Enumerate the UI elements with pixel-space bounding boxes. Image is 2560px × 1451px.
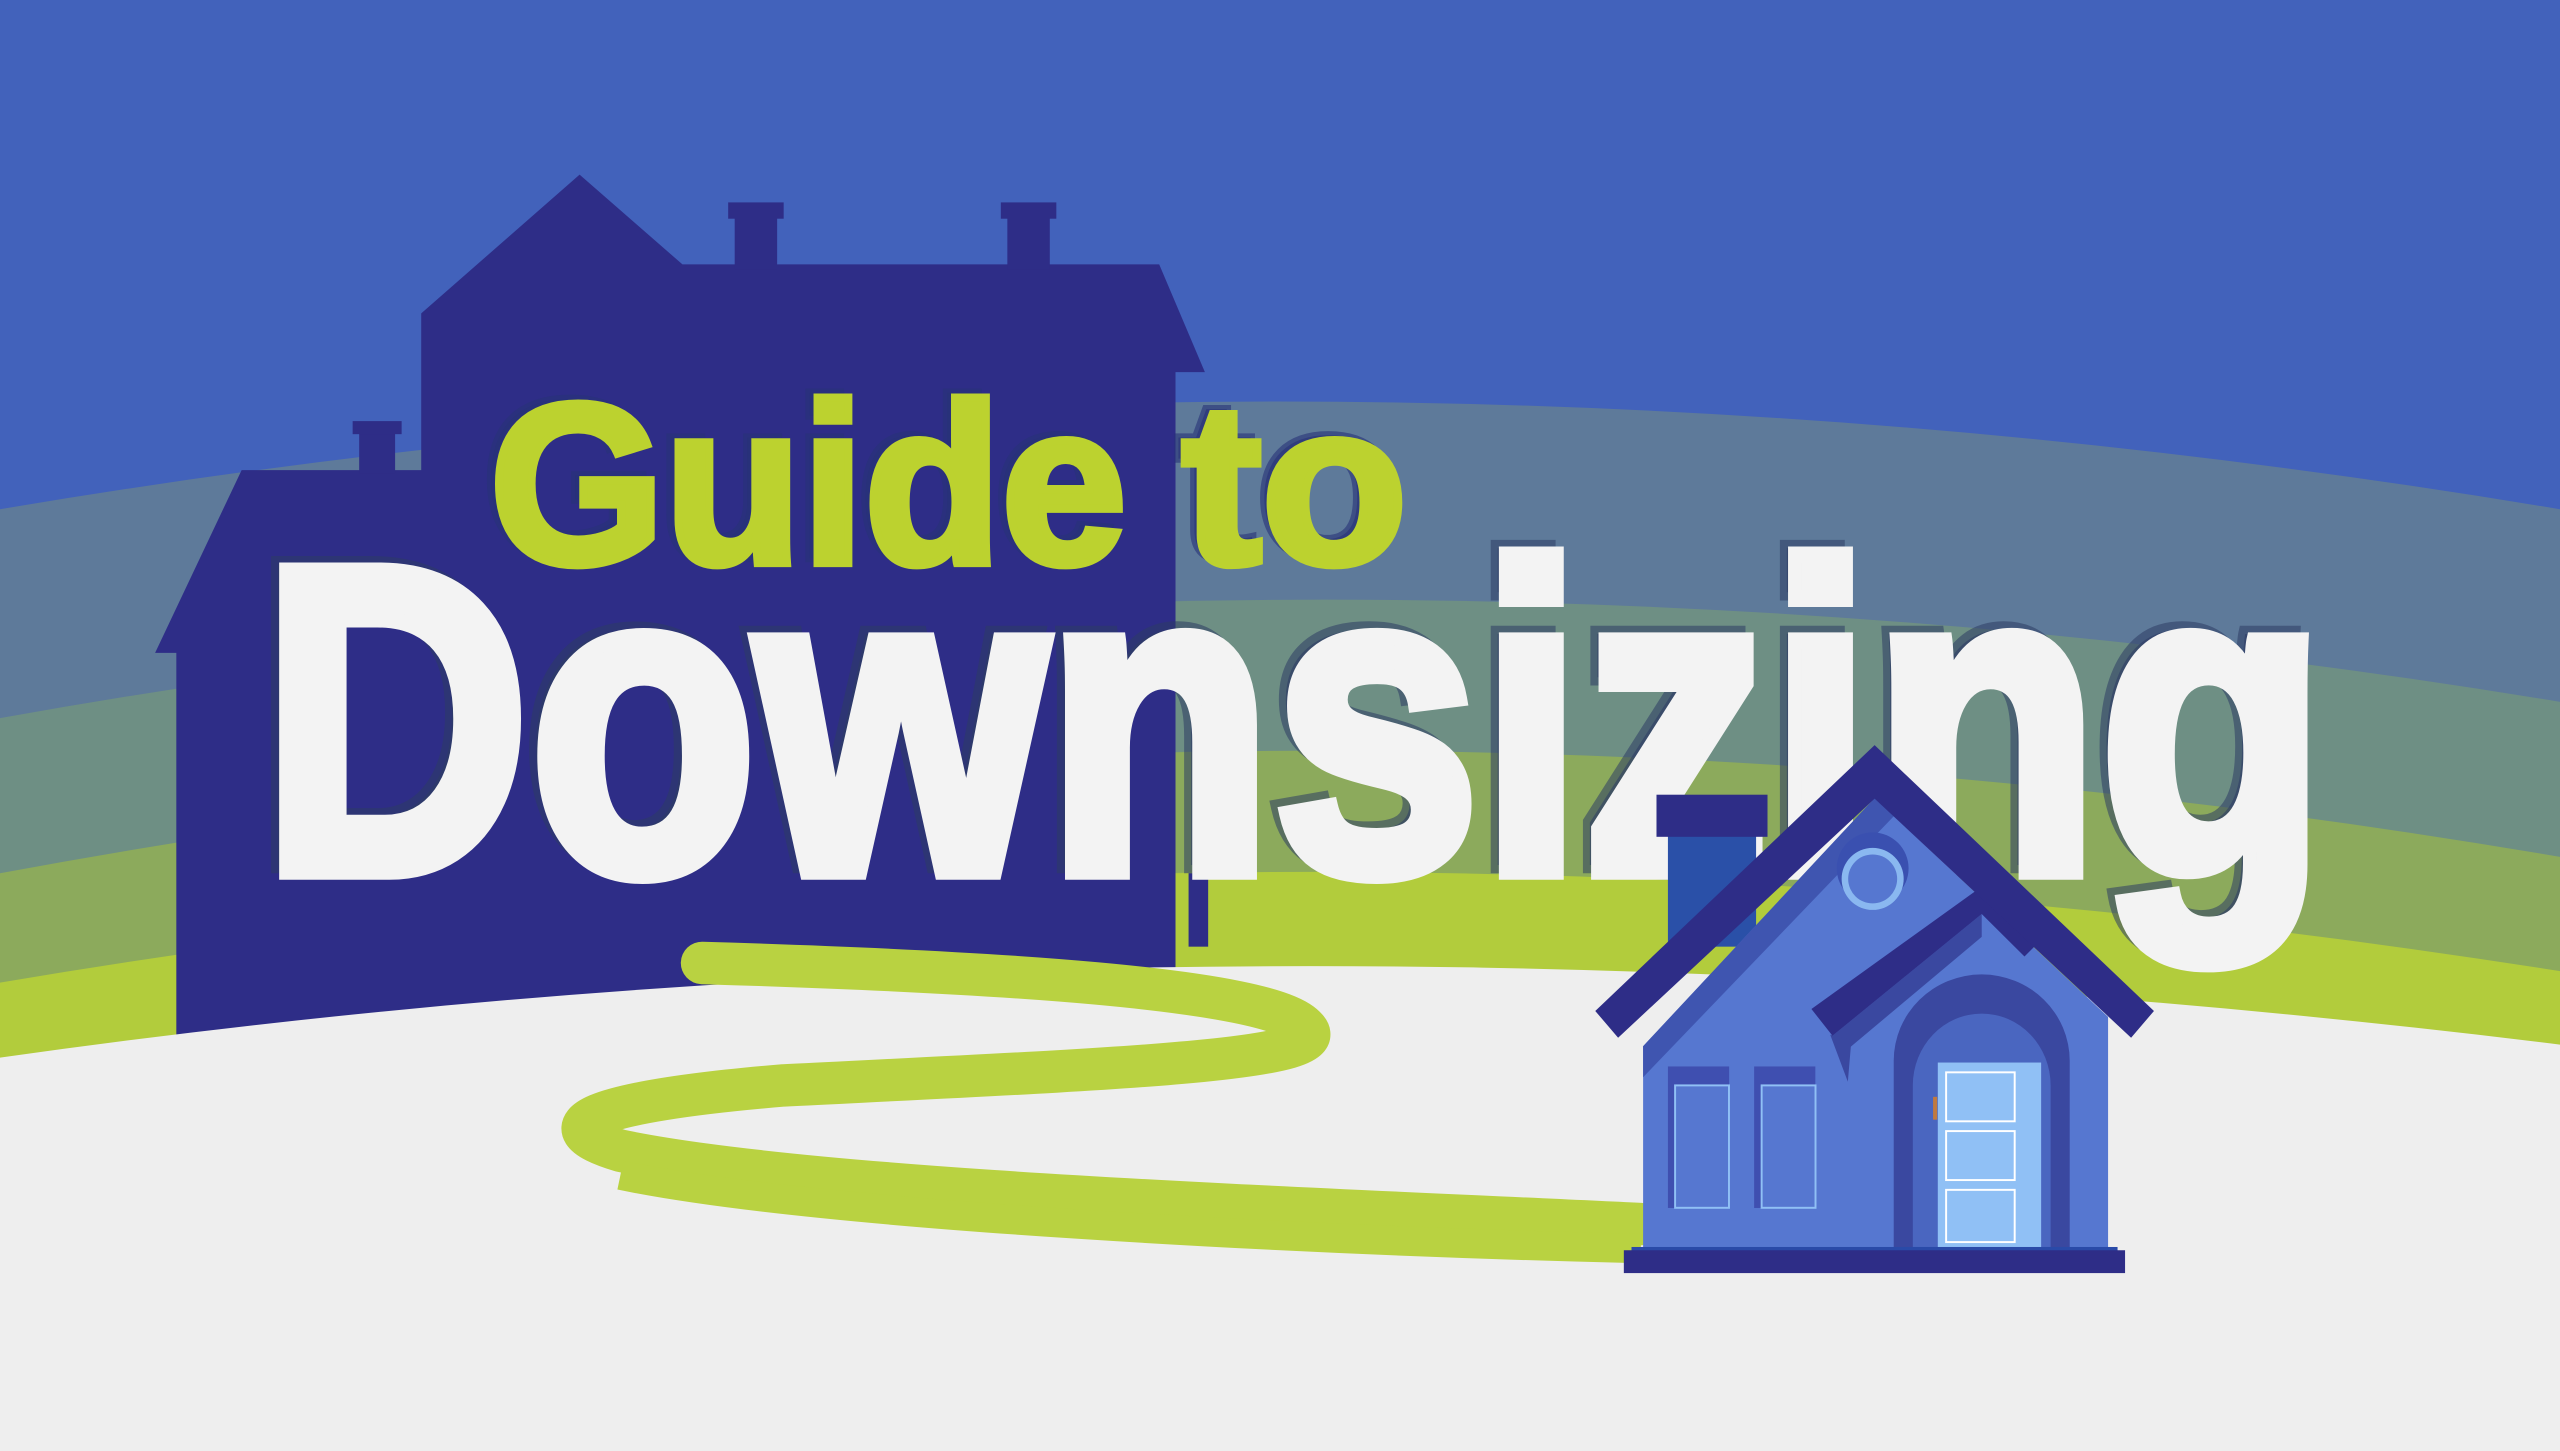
hill bands (0, 402, 2560, 1451)
title: Guide to: Guide (490, 357, 1127, 612)
big house silhouette (155, 175, 1208, 1077)
round window (1837, 832, 1909, 904)
windows (1668, 1066, 1729, 1208)
ground (0, 966, 2560, 1451)
chimney (1668, 824, 1756, 947)
title: Guide to: to (1182, 357, 1407, 612)
wall (1643, 798, 2108, 1258)
steps (1632, 1247, 2118, 1270)
small house (1595, 745, 2154, 1273)
arch (1894, 974, 2070, 1258)
winding path (583, 963, 1641, 1224)
door (1938, 1063, 2041, 1258)
title: Guide to: to (1176, 352, 1401, 607)
title: Guide to: Guide (482, 352, 1118, 607)
porch gable (1832, 914, 1982, 1054)
title: Guide to (482, 352, 1407, 612)
chimneys (735, 204, 777, 269)
main roof (1595, 745, 2154, 1038)
